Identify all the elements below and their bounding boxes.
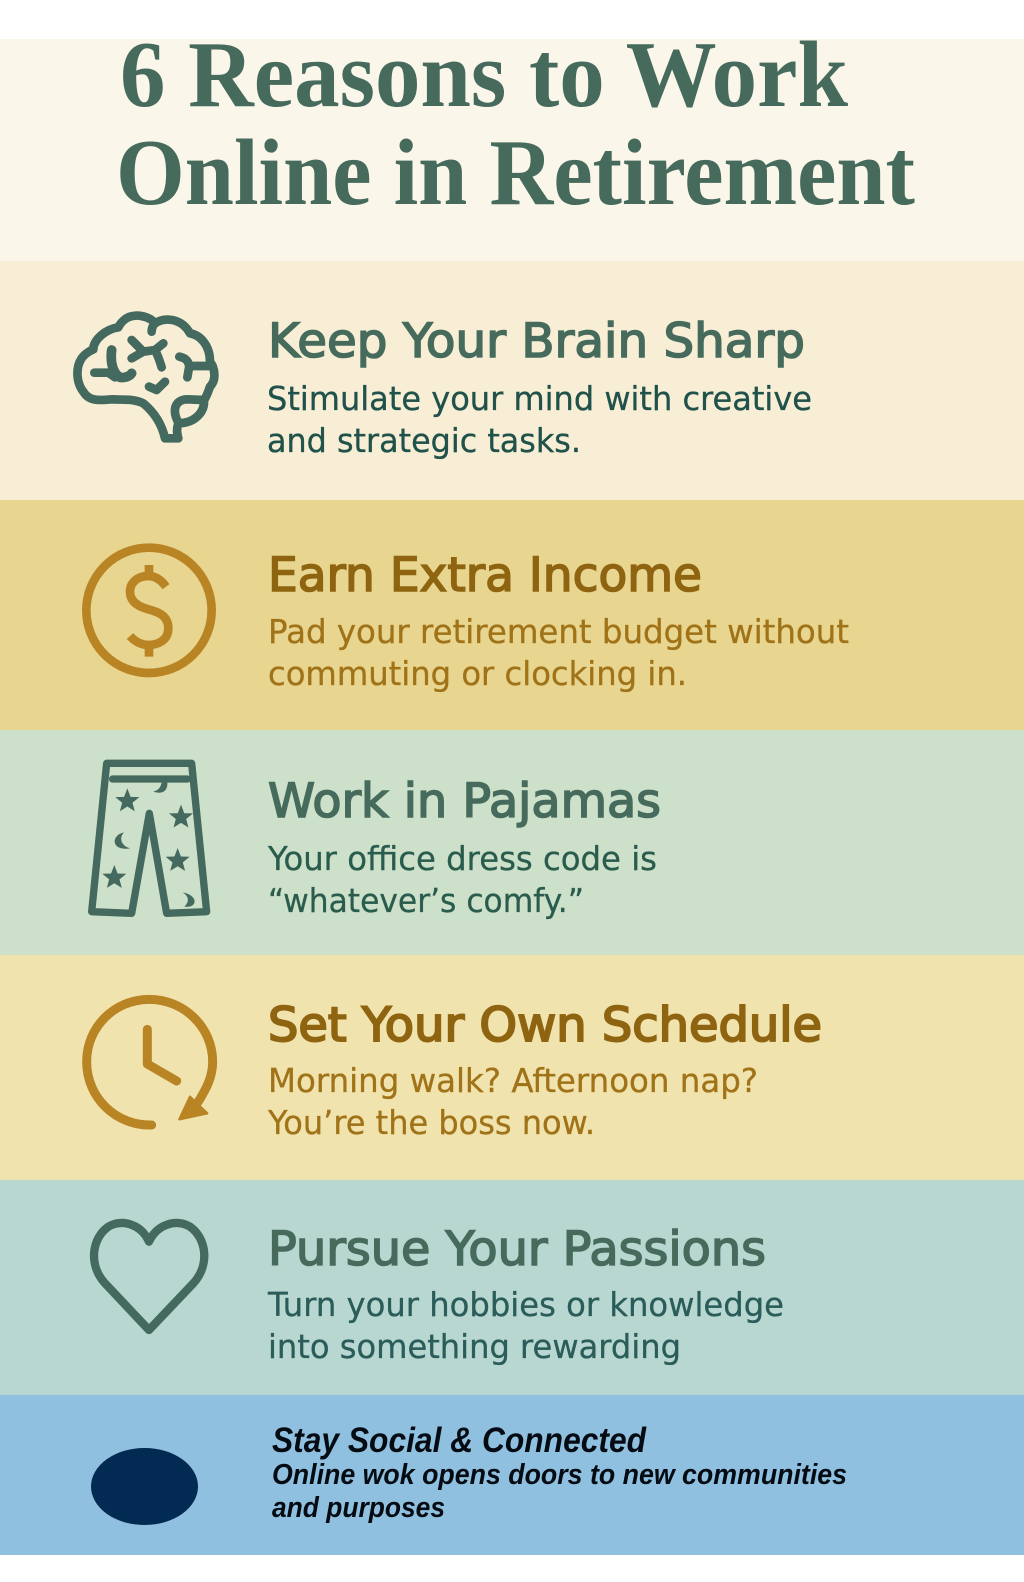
description — [267, 1061, 758, 1142]
description — [267, 1285, 784, 1366]
icon: dollar coin — [86, 548, 212, 673]
description: Your office dress code is — [267, 839, 657, 878]
heading: Set Your Own Schedule — [268, 998, 822, 1053]
heading: Keep Your Brain Sharp — [268, 314, 805, 369]
description: You’re the boss now. — [267, 1103, 595, 1142]
description — [267, 839, 657, 920]
description: “whatever’s comfy.” — [268, 881, 584, 920]
heading: Stay Social & Connected — [272, 1421, 647, 1460]
panel: earn extra income — [0, 500, 1024, 730]
description: and purposes — [272, 1492, 445, 1524]
heading: Pursue Your Passions — [268, 1222, 766, 1277]
description: Turn your hobbies or knowledge — [267, 1285, 784, 1324]
title line 2: Online in Retirement — [116, 121, 915, 225]
panel: work in pajamas — [0, 730, 1024, 955]
description: commuting or clocking in. — [268, 654, 687, 693]
icon: clock with arrow — [87, 999, 213, 1125]
description — [272, 1459, 847, 1524]
icon: pajama pants — [92, 763, 207, 913]
description: and strategic tasks. — [267, 421, 581, 460]
description: Pad your retirement budget without — [268, 612, 849, 651]
heading: Work in Pajamas — [268, 774, 661, 829]
icon: brain — [77, 316, 214, 438]
icon: heart — [94, 1223, 204, 1330]
panel: pursue your passions — [0, 1180, 1024, 1395]
panel: set your own schedule — [0, 955, 1024, 1180]
title line 1: 6 Reasons to Work — [120, 23, 849, 127]
description — [268, 612, 849, 693]
description: Stimulate your mind with creative — [267, 379, 812, 418]
icon: navy ellipse — [91, 1448, 198, 1525]
description: Morning walk? Afternoon nap? — [268, 1061, 758, 1100]
description — [267, 379, 812, 460]
panel: title — [0, 23, 1024, 261]
heading: Earn Extra Income — [268, 548, 702, 603]
description: Online wok opens doors to new communities — [272, 1459, 847, 1491]
panel: stay social and connected — [0, 1395, 1024, 1555]
description: into something rewarding — [268, 1327, 681, 1366]
panel: keep your brain sharp — [0, 261, 1024, 500]
